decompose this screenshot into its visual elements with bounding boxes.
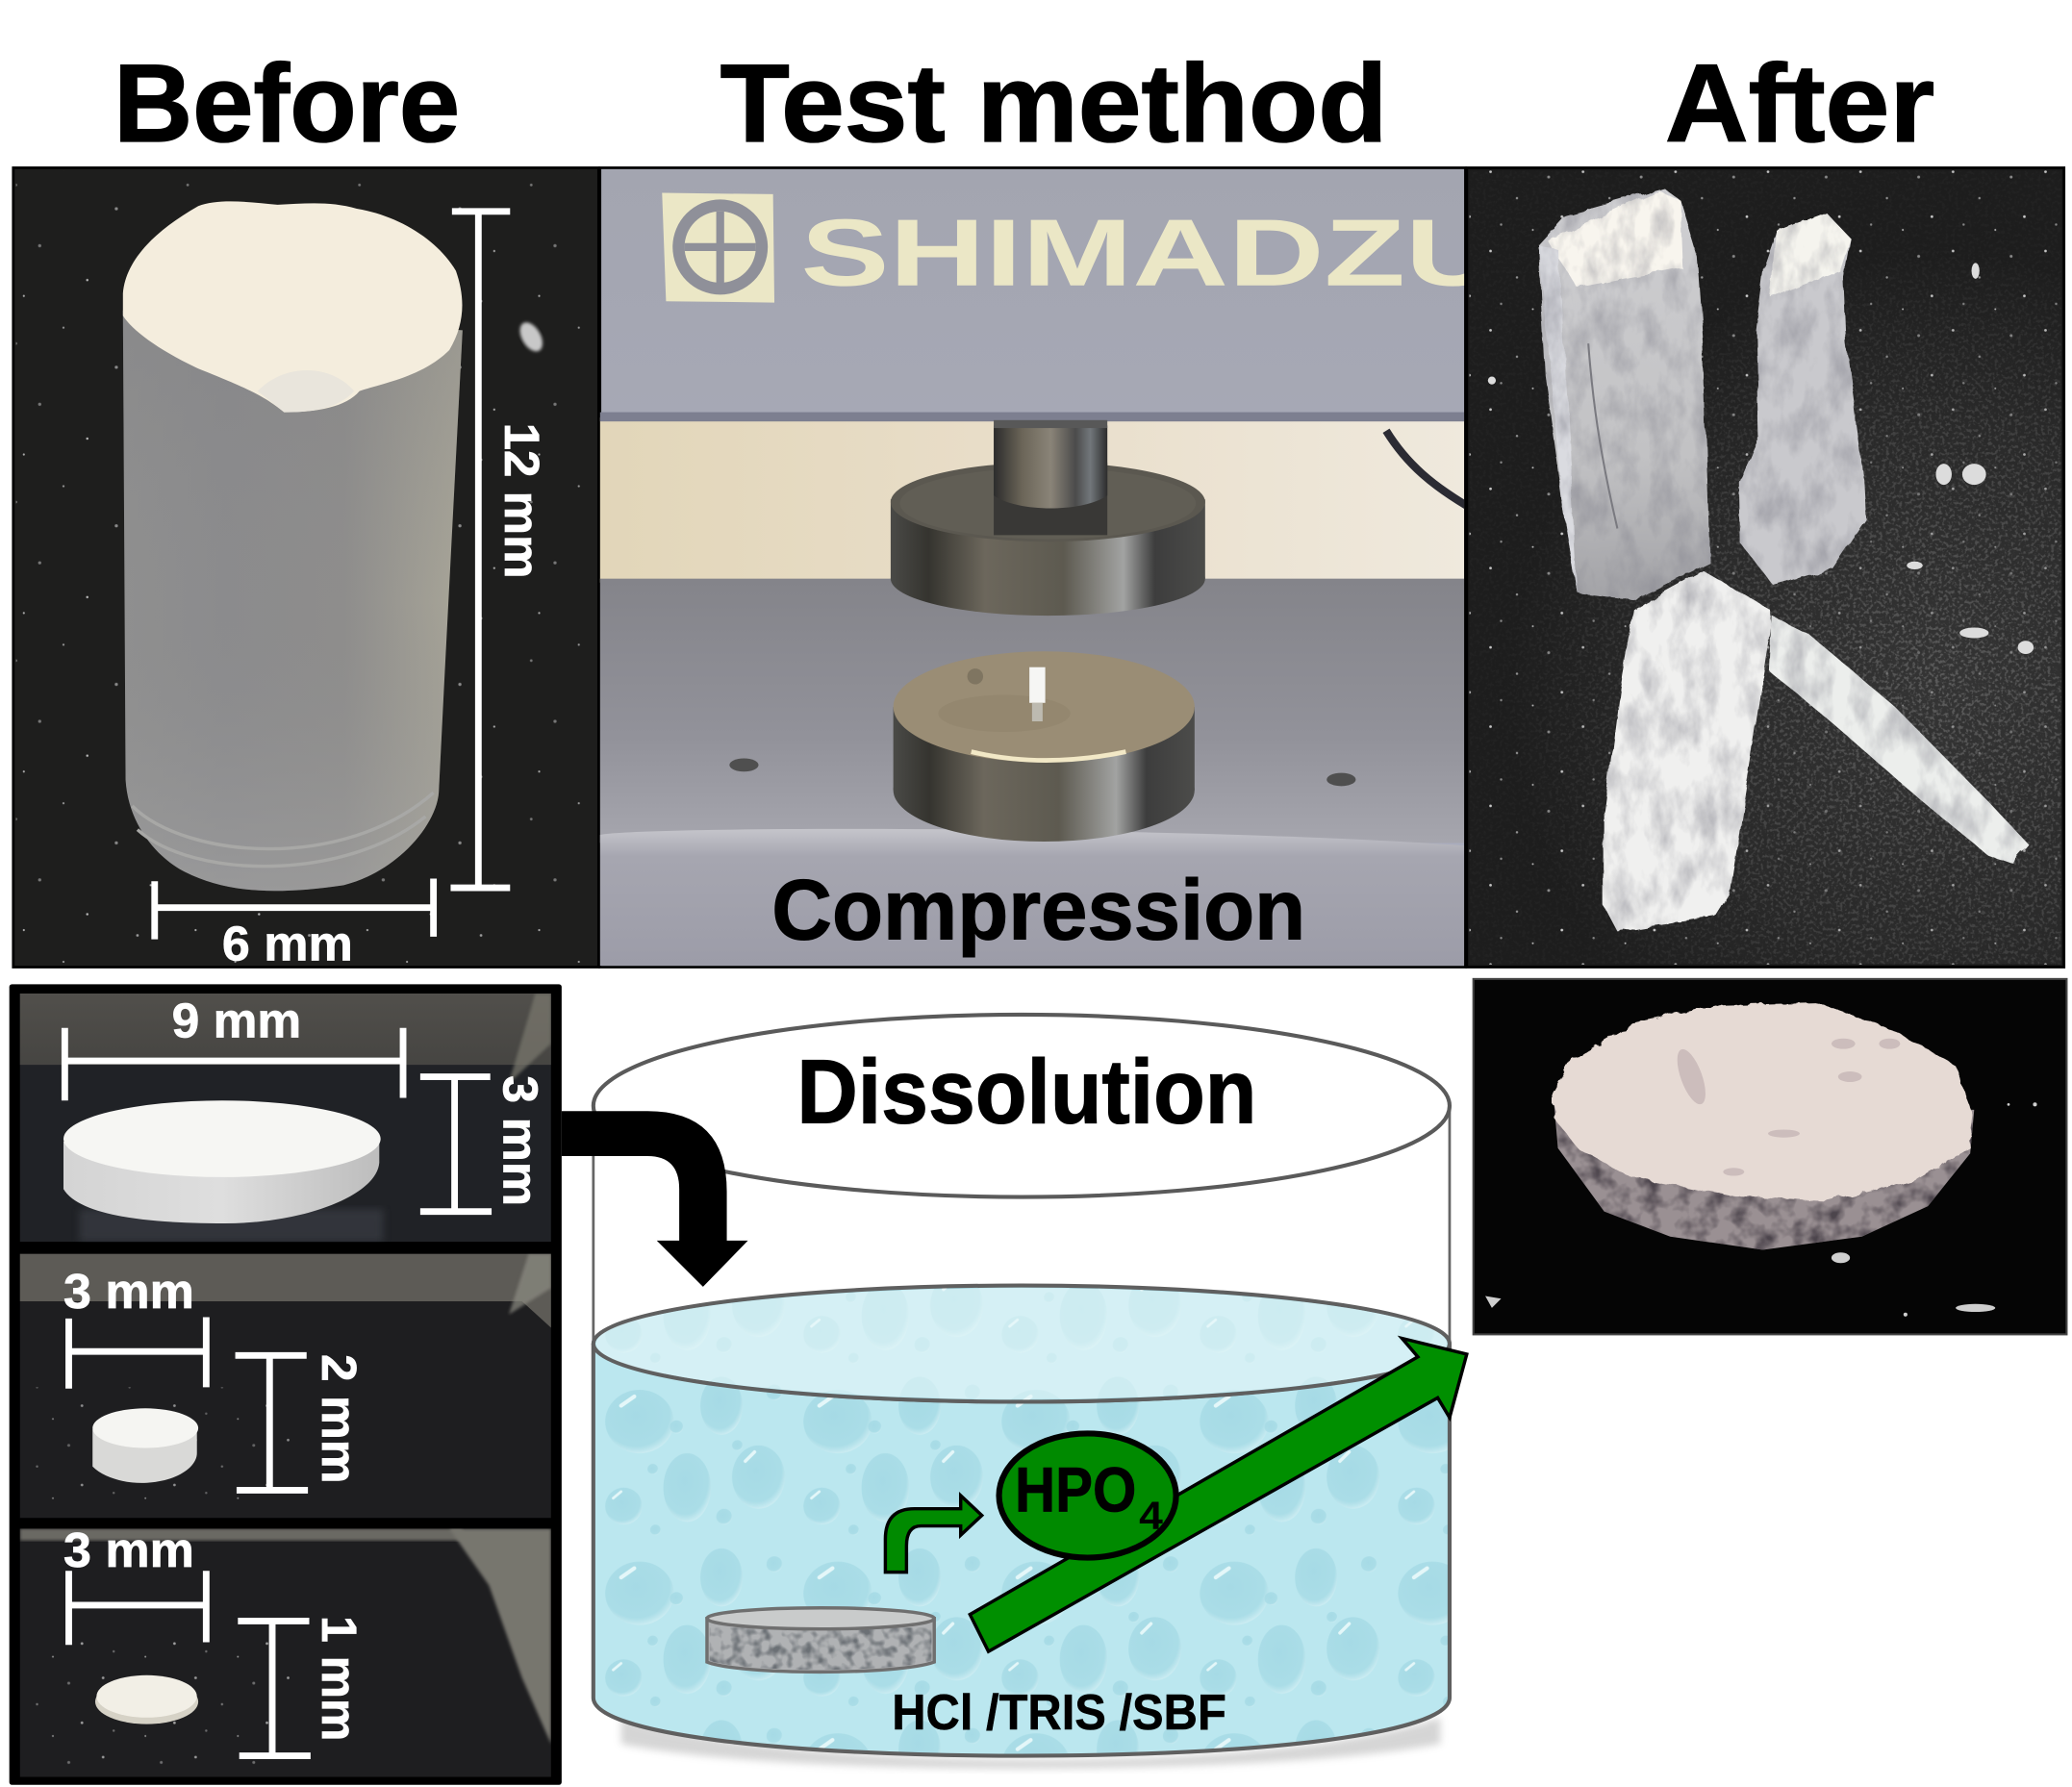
arrow: large green outflow — [970, 1339, 1467, 1651]
disc top — [1554, 1003, 1974, 1201]
title: Before: Before — [114, 42, 460, 165]
fragment: front slab — [1605, 570, 1772, 931]
cylinder top face — [123, 201, 462, 413]
table top — [600, 579, 1464, 843]
panel: before discs frame — [10, 984, 562, 1785]
ion bubble: HPO4 — [999, 1433, 1176, 1558]
dimension: 9 mm — [64, 993, 403, 1100]
fragment: tall right — [1739, 213, 1866, 586]
liquid body — [594, 1344, 1450, 1756]
sample disc in liquid — [707, 1608, 934, 1672]
fragments group — [1538, 188, 2030, 931]
dimension: 6 mm: 6 mm — [222, 917, 353, 971]
dimension: 12 mm: 12 mm — [494, 423, 549, 579]
arrow: small green release — [885, 1496, 982, 1573]
table holes — [729, 758, 759, 771]
label: Dissolution: Dissolution — [796, 1042, 1256, 1144]
disc side — [1554, 1103, 1974, 1249]
liquid surface — [594, 1286, 1450, 1401]
crack in left fragment — [1588, 343, 1617, 528]
cable — [1386, 431, 1470, 507]
dust haze — [1470, 170, 2061, 965]
cylinder shading — [123, 311, 463, 891]
dimension: 1 mm height — [238, 1616, 366, 1756]
photo: 3x1 mm pellet — [20, 1528, 551, 1777]
dimension: 3 mm width lower — [63, 1523, 206, 1645]
dimension: 3 mm height — [420, 1075, 547, 1212]
fragment: rod leaning — [1769, 616, 2030, 864]
beaker shadow — [621, 1718, 1440, 1769]
panel: test method photo, compression — [600, 167, 1502, 968]
dimension: 6 mm — [155, 878, 434, 971]
dissolution beaker diagram — [562, 1015, 1467, 1769]
fragment: tall left — [1538, 188, 1710, 600]
dimension: 3 mm height: 3 mm — [493, 1075, 547, 1206]
logo badge — [662, 193, 774, 303]
machine underside line — [600, 413, 1464, 421]
dimension: 1 mm height: 1 mm — [312, 1616, 366, 1741]
lower platen — [894, 651, 1195, 842]
debris — [1485, 1102, 2037, 1317]
dimension: 9 mm: 9 mm — [172, 993, 301, 1047]
logo wordmark: SHIMADZU — [800, 199, 1502, 306]
dimension: 3 mm width lower: 3 mm — [63, 1523, 194, 1577]
chipped area on top face — [258, 370, 354, 413]
title: After: After — [1665, 42, 1934, 165]
white debris — [1488, 263, 2034, 654]
table front — [600, 829, 1464, 968]
dimension: 12 mm — [450, 212, 549, 888]
photo: 3x2 mm pellet — [20, 1254, 551, 1518]
disc side texture — [1554, 1103, 1974, 1249]
ion bubble: HPO4: HPO — [1015, 1453, 1136, 1524]
specimen pin — [1029, 667, 1046, 703]
label: media: HCl /TRIS /SBF — [892, 1685, 1226, 1741]
base ring lines — [132, 793, 434, 867]
panel: before photo, tall cylinder — [13, 167, 598, 971]
photo: 9 mm disc — [20, 994, 551, 1242]
panel: after dissolution disc photo — [1474, 979, 2066, 1334]
panel: after photo, fractured pieces — [1467, 167, 2064, 968]
dimension: 3 mm width: 3 mm — [63, 1264, 194, 1319]
cylinder body — [123, 311, 463, 891]
label: Compression: Compression — [771, 862, 1305, 958]
title: Test method: Test method — [720, 42, 1387, 165]
dimension: 3 mm width — [63, 1264, 206, 1389]
ion bubble: HPO4: 4 — [1139, 1493, 1163, 1537]
wall — [600, 417, 1464, 583]
beaker side walls — [594, 1106, 1450, 1344]
arrow: black curved into beaker — [562, 1111, 748, 1287]
dimension: 2 mm height — [236, 1354, 366, 1490]
beaker rim — [594, 1015, 1450, 1197]
upper platen — [891, 420, 1205, 616]
disc top blotches — [1672, 1039, 1900, 1176]
dimension: 2 mm height: 2 mm — [312, 1354, 366, 1484]
surface highlight — [596, 1288, 1447, 1399]
